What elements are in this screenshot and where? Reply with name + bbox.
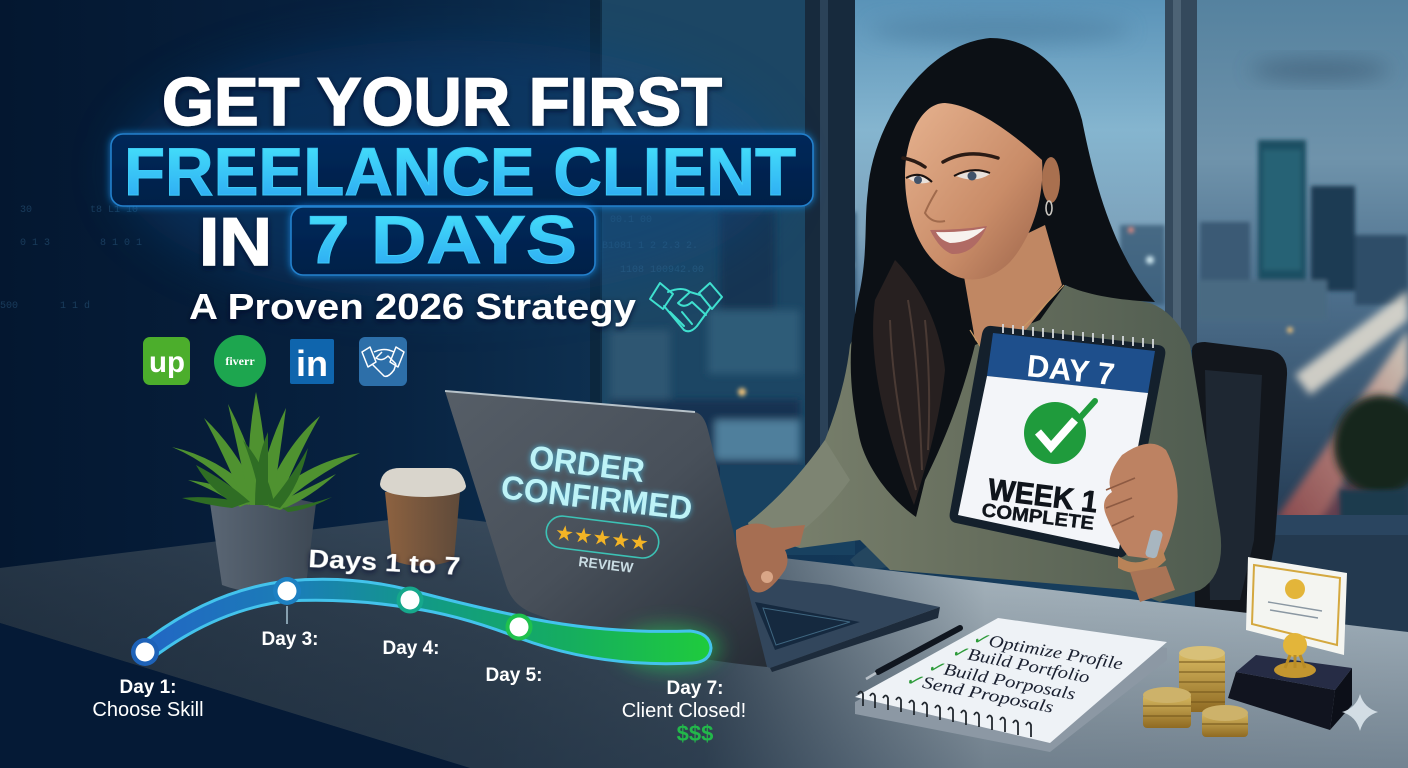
hand holding calendar — [1104, 444, 1178, 602]
order confirmed text: ORDER — [527, 438, 647, 489]
neck and chest — [962, 225, 1062, 362]
title — [111, 64, 813, 280]
typing arm and hand — [736, 523, 805, 592]
eyes — [908, 176, 930, 183]
icon: handshake outline — [650, 283, 722, 331]
subtitle: A Proven 2026 Strategy — [189, 286, 636, 327]
panel: city view through windows — [600, 0, 1408, 540]
icon: fiverr logo: fiverr — [225, 354, 255, 368]
calendar heading: DAY 7 — [1025, 348, 1116, 392]
7 days box: 7 DAYS — [307, 202, 577, 278]
window frames — [590, 0, 1408, 635]
decorative data texture on left wall: 8 1 0 1 — [100, 238, 142, 249]
end-of-ribbon green glow — [620, 626, 720, 670]
checklist text: ✓Build Porposals — [925, 656, 1078, 704]
label day 5: Day 5: — [485, 665, 543, 686]
decorative data texture on left wall: B1081 1 2 2.3 2. — [602, 241, 698, 252]
order confirmed text: CONFIRMED — [499, 468, 694, 527]
icon: upwork logo — [143, 337, 190, 385]
calendar spiral binding — [1003, 324, 1153, 348]
notebook checklist — [855, 618, 1167, 752]
decorative data texture on left wall: 500 — [0, 301, 18, 312]
week 1 complete text: COMPLETE — [980, 500, 1095, 535]
label day 3: Day 3: — [261, 629, 319, 650]
face — [905, 103, 1042, 279]
node day 4 — [396, 586, 424, 614]
label day 1: Choose Skill — [92, 699, 204, 721]
notebook spiral — [858, 692, 1031, 737]
label day 7: $$$ — [677, 721, 713, 746]
green check icon — [1024, 401, 1095, 464]
timeline ribbon — [140, 579, 711, 664]
icon: fiverr logo — [214, 335, 266, 387]
eyebrows — [903, 154, 998, 167]
necklace — [970, 285, 1064, 362]
icon: upwork logo: up — [149, 346, 185, 379]
checklist text: ✓Optimize Profile — [970, 628, 1125, 674]
label day 1 — [92, 677, 204, 721]
decorative data texture on left wall: 00.1 00 — [610, 215, 652, 226]
coffee cup — [380, 468, 466, 566]
gold coins — [1143, 646, 1248, 737]
title word in: IN — [199, 204, 272, 280]
label day 7 — [622, 678, 746, 746]
node day 3 — [273, 577, 301, 605]
decorative data texture on left wall: 1 1 d — [60, 300, 90, 312]
node day 1 — [131, 638, 159, 666]
calendar: day 7 week 1 complete — [950, 324, 1165, 557]
certificate on stand — [1228, 557, 1352, 730]
icon: linkedin logo: in — [296, 343, 328, 384]
nose — [925, 190, 945, 222]
decorative data texture on left wall: 0 1 3 — [20, 238, 50, 249]
label day 4: Day 4: — [382, 638, 440, 659]
laptop keyboard base — [700, 575, 940, 672]
checklist text — [903, 628, 1125, 717]
woman holding calendar — [748, 38, 1221, 602]
left-wall glow behind title — [120, 40, 780, 300]
decorative data texture on left wall: 1108 100942.00 — [620, 265, 704, 276]
node day 5 — [506, 614, 532, 640]
hair back — [851, 38, 1155, 517]
skyline city lights glow — [738, 227, 1293, 396]
checklist text: ✓Send Proposals — [903, 669, 1056, 717]
smile — [930, 226, 987, 254]
pen — [866, 628, 960, 679]
earring — [1046, 201, 1052, 215]
sparkle mark — [1342, 694, 1378, 731]
desk — [0, 515, 1408, 768]
office chair — [850, 342, 1287, 615]
title line 1: GET YOUR FIRST — [162, 64, 722, 140]
decorative data texture on left wall: t8 L1 10 — [90, 205, 138, 216]
timeline heading: Days 1 to 7 — [308, 545, 461, 581]
blouse — [748, 285, 1221, 602]
laptop lid with order confirmed — [445, 391, 767, 667]
rating pill — [544, 514, 661, 560]
review label: REVIEW — [578, 553, 635, 576]
label day 7: Client Closed! — [622, 700, 746, 722]
rating pill: ★★★★★ — [554, 521, 650, 556]
order confirmed text — [499, 438, 694, 527]
timeline: days 1 to 7 — [92, 545, 746, 746]
icon: linkedin logo — [290, 339, 334, 384]
freelance client box: FREELANCE CLIENT — [124, 134, 796, 210]
label day 1: Day 1: — [119, 677, 177, 698]
city road streaks — [1275, 290, 1408, 530]
week 1 complete text: WEEK 1 — [986, 473, 1099, 519]
icon: handshake badge — [359, 337, 407, 386]
decorative data texture on left wall — [0, 205, 704, 312]
plant in pot — [172, 392, 360, 592]
checklist text: ✓Build Portfolio — [949, 641, 1091, 687]
ear — [1042, 157, 1060, 203]
label day 7: Day 7: — [666, 678, 724, 699]
decorative data texture on left wall: 30 — [20, 205, 32, 216]
